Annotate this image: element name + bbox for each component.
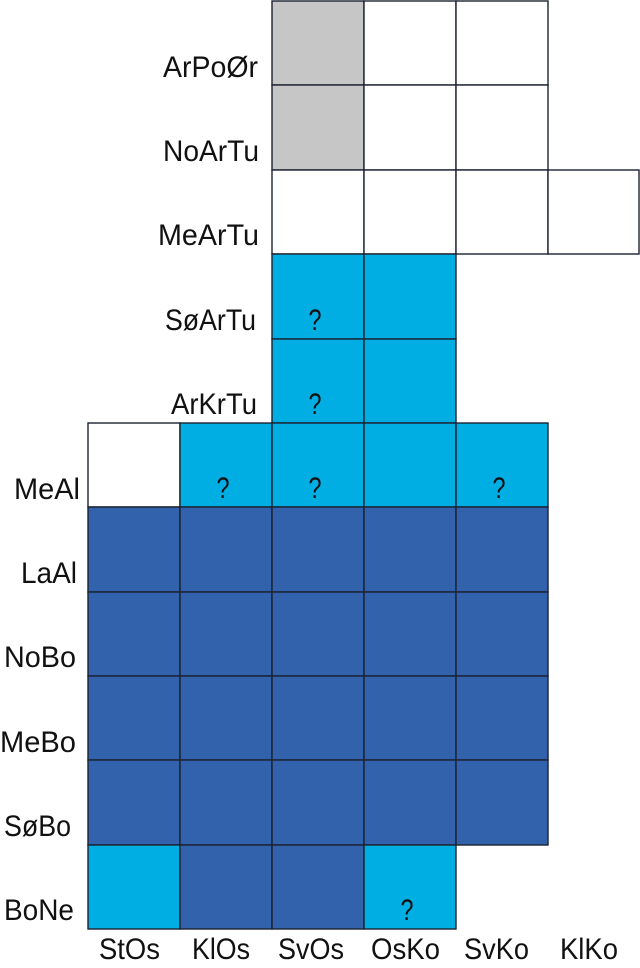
column labels: KlOs xyxy=(192,933,250,966)
row labels: ArKrTu xyxy=(171,388,257,421)
row: MeArTu xyxy=(272,170,639,254)
row labels: MeBo xyxy=(0,726,76,759)
row: LaAl xyxy=(88,507,548,592)
row labels xyxy=(0,51,259,927)
row: MeBo xyxy=(88,676,548,760)
uncertainty marks: ? xyxy=(308,388,322,421)
row: BoNe xyxy=(88,845,456,929)
column labels: KlKo xyxy=(560,933,618,966)
uncertainty marks: ? xyxy=(308,472,322,505)
row labels: MeAl xyxy=(14,473,80,506)
column labels: SvKo xyxy=(464,933,529,966)
row: SøArTu xyxy=(272,254,456,339)
uncertainty marks: ? xyxy=(400,894,414,927)
row: MeAl xyxy=(88,423,548,507)
column labels xyxy=(99,933,618,966)
row: SøBo xyxy=(88,760,548,845)
row labels: NoBo xyxy=(4,641,76,674)
column labels: StOs xyxy=(99,933,160,966)
uncertainty marks: ? xyxy=(216,472,230,505)
row: ArKrTu xyxy=(272,339,456,423)
column labels: SvOs xyxy=(278,933,344,966)
row labels: MeArTu xyxy=(158,219,259,252)
row: NoBo xyxy=(88,592,548,676)
row labels: SøArTu xyxy=(165,304,256,337)
uncertainty marks xyxy=(216,304,506,927)
row: ArPoØr xyxy=(272,1,548,85)
row labels: SøBo xyxy=(4,810,71,843)
column labels: OsKo xyxy=(371,933,440,966)
row labels: ArPoØr xyxy=(163,51,258,84)
row labels: LaAl xyxy=(21,557,77,590)
row labels: NoArTu xyxy=(163,135,259,168)
uncertainty marks: ? xyxy=(308,304,322,337)
row labels: BoNe xyxy=(4,894,74,927)
uncertainty marks: ? xyxy=(492,472,506,505)
row: NoArTu xyxy=(272,85,548,170)
